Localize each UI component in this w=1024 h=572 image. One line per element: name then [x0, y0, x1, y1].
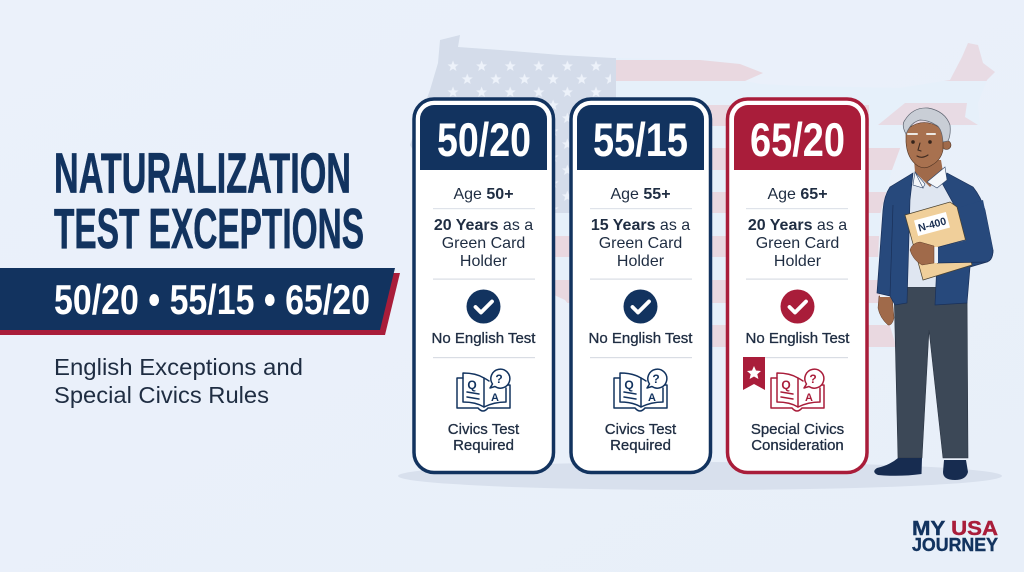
head: [906, 122, 943, 168]
green card requirement: 15 Years as a: [591, 217, 690, 234]
panel: 50/20 card: [414, 99, 554, 472]
age requirement: Age 65+: [767, 186, 828, 203]
title: NATURALIZATION: [54, 142, 351, 206]
card header: 65/20: [734, 105, 861, 170]
card header: 55/15: [577, 105, 704, 170]
panel: 55/15 card: [571, 99, 710, 472]
forearm: [935, 200, 993, 263]
logo: JOURNEY: [912, 535, 998, 555]
illustration: older man holding N-400 folder: [874, 108, 993, 480]
subtitle: [54, 354, 303, 408]
green card requirement: Green Card: [442, 235, 525, 252]
ear: [942, 140, 951, 150]
icon: civics book: [771, 369, 824, 411]
icon: civics book: Q: [624, 378, 634, 392]
age requirement: Age 55+: [610, 186, 671, 203]
icon: ribbon with star: [743, 357, 765, 390]
green card requirement: [748, 217, 847, 270]
subtitle: English Exceptions and: [54, 354, 303, 380]
icon: civics book: [457, 369, 510, 411]
jacket: [877, 173, 993, 305]
card header: 50/20: [420, 105, 547, 170]
trousers: [894, 287, 968, 458]
banner: rule names: 50/20 • 55/15 • 65/20: [54, 276, 370, 323]
panel: 65/20 card: [728, 99, 867, 472]
background flag map of the USA: [400, 30, 1000, 350]
icon: civics book: A: [491, 392, 499, 404]
civics test label: [605, 421, 677, 454]
green card requirement: [434, 217, 533, 270]
civics test label: Civics Test: [448, 421, 520, 438]
shirt: [907, 175, 956, 287]
civics test label: [448, 421, 520, 454]
special civics label: Consideration: [751, 437, 844, 454]
icon: civics book: Q: [467, 378, 477, 392]
banner: rule names: [0, 268, 400, 335]
civics test label: Required: [453, 437, 514, 454]
title: TEST EXCEPTIONS: [54, 197, 364, 261]
left hand: [878, 296, 894, 325]
shoes: [874, 458, 968, 480]
face details: [908, 134, 935, 157]
ground shadow: [398, 462, 1002, 490]
jacket sleeve seam: [890, 205, 893, 296]
special civics label: Special Civics: [751, 421, 844, 438]
logo: [912, 518, 998, 555]
folder: [905, 202, 972, 280]
icon: check: [780, 290, 814, 324]
folder label: N-400: N-400: [917, 215, 948, 234]
icon: civics book: ?: [809, 372, 817, 386]
card header: 50/20: 50/20: [437, 113, 531, 166]
civics test label: Civics Test: [605, 421, 677, 438]
icon: civics book: [614, 369, 667, 411]
no english test label: No English Test: [746, 330, 850, 347]
icon: check: [624, 290, 658, 324]
subtitle: Special Civics Rules: [54, 382, 269, 408]
card header: 65/20: 65/20: [750, 113, 845, 166]
green card requirement: Green Card: [756, 235, 839, 252]
green card requirement: 20 Years as a: [748, 217, 847, 234]
no english test label: No English Test: [589, 330, 693, 347]
age requirement: Age 50+: [453, 186, 514, 203]
neck: [914, 160, 943, 187]
icon: civics book: A: [648, 392, 656, 404]
card header: 55/15: 55/15: [593, 113, 688, 166]
green card requirement: Holder: [774, 253, 822, 270]
no english test label: No English Test: [432, 330, 536, 347]
green card requirement: [591, 217, 690, 270]
shirt cuff: [880, 293, 891, 297]
collar: [913, 167, 947, 188]
icon: civics book: Q: [781, 378, 791, 392]
icon: check: [466, 290, 500, 324]
logo: MY USA: [912, 518, 998, 540]
green card requirement: 20 Years as a: [434, 217, 533, 234]
green card requirement: Green Card: [599, 235, 682, 252]
right hand: [910, 242, 934, 265]
civics test label: Required: [610, 437, 671, 454]
green card requirement: Holder: [617, 253, 665, 270]
icon: civics book: ?: [495, 372, 503, 386]
special civics label: [751, 421, 844, 454]
icon: civics book: A: [805, 392, 813, 404]
hair: [903, 108, 950, 142]
forearm lower edge: [935, 240, 993, 263]
icon: civics book: ?: [652, 372, 660, 386]
title: [54, 142, 364, 261]
shirt cuff right: [934, 247, 938, 263]
green card requirement: Holder: [460, 253, 508, 270]
